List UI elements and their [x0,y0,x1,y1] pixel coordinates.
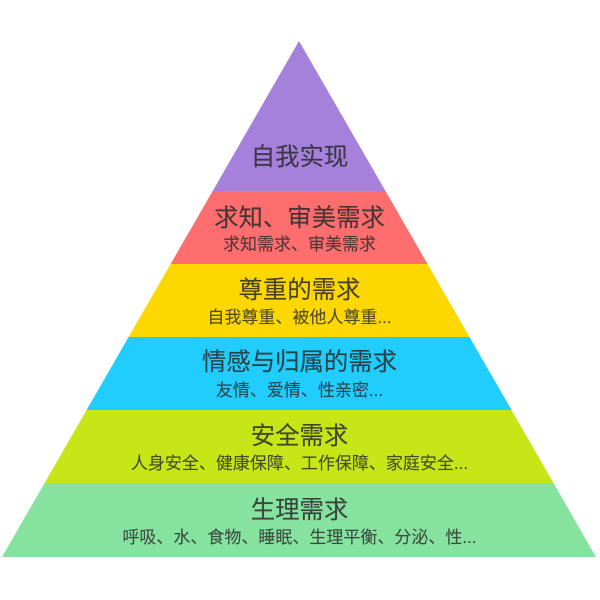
heading: safety needs: 安全需求 [251,423,348,450]
heading: love and belonging needs: 情感与归属的需求 [202,349,397,376]
tier: safety needs [45,410,553,483]
description: safety needs: 人身安全、健康保障、工作保障、家庭安全... [131,454,468,473]
heading: physiological needs: 生理需求 [251,497,348,524]
tier: self-actualization [213,41,386,191]
heading: cognitive and aesthetic needs: 求知、审美需求 [214,205,385,232]
heading: self-actualization: 自我实现 [251,144,348,171]
tier: physiological needs [2,483,596,557]
tier: love and belonging needs [87,337,511,410]
tier: esteem needs [129,264,470,337]
description: love and belonging needs: 友情、爱情、性亲密... [216,381,383,400]
description: esteem needs: 自我尊重、被他人尊重... [207,308,392,327]
heading: esteem needs: 尊重的需求 [239,277,360,304]
tier: cognitive and aesthetic needs [171,191,428,264]
description: physiological needs: 呼吸、水、食物、睡眠、生理平衡、分泌、性... [122,528,477,547]
description: cognitive and aesthetic needs: 求知需求、审美需求 [223,235,376,254]
